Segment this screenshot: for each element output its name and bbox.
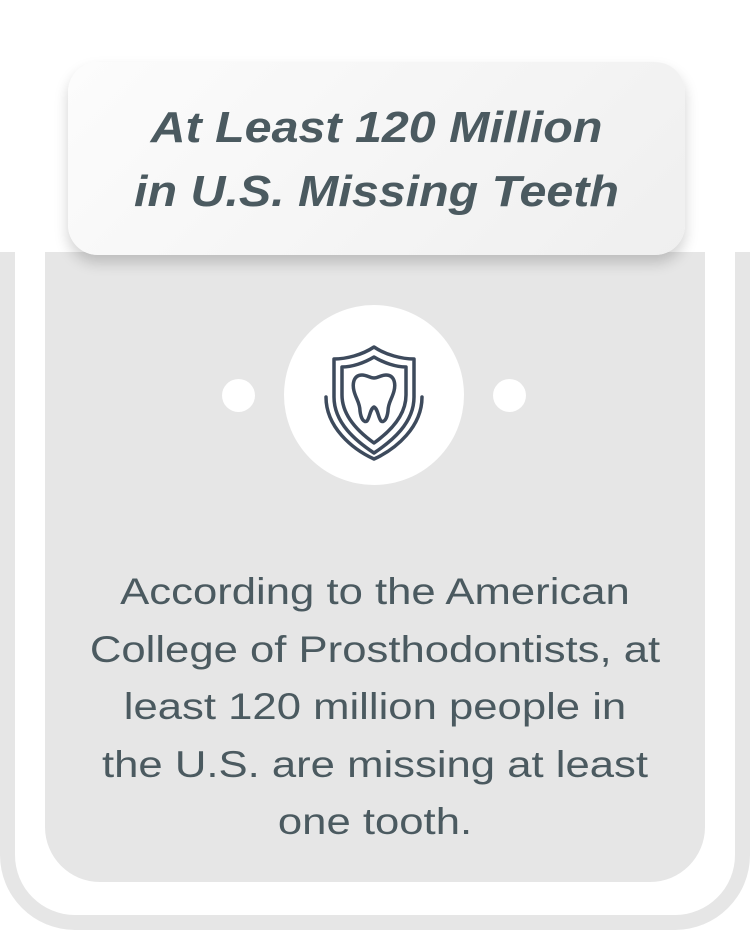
body text: the U.S. are missing at least [102,744,648,784]
dot left [222,379,255,412]
icon: tooth shield [284,305,464,485]
body text [90,571,660,842]
body text: one tooth. [278,801,472,842]
body text: College of Prosthodontists, at [90,628,660,670]
title card: At Least 120 Million [151,103,602,152]
dot right [493,379,526,412]
body text: According to the American [120,571,630,612]
outer frame [0,252,750,930]
body text: least 120 million people in [124,686,626,727]
title card [68,62,685,255]
inner panel [45,252,705,882]
title card: in U.S. Missing Teeth [134,167,619,216]
